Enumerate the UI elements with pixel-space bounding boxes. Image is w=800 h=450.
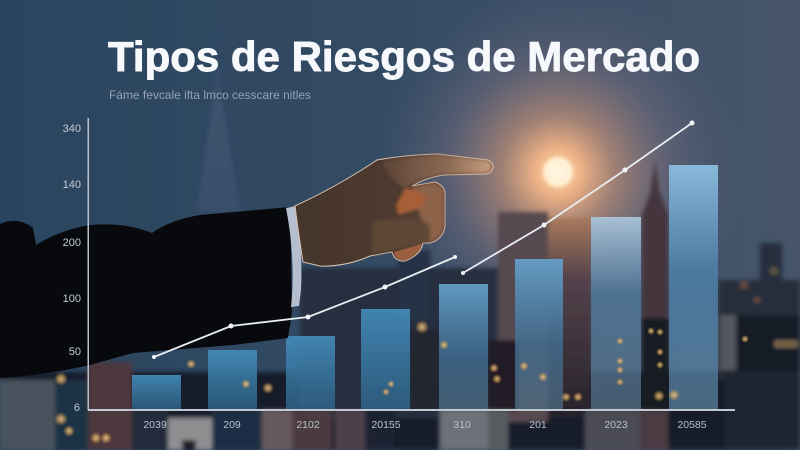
bar 209 (208, 350, 257, 409)
x axis labels: 2023 (604, 419, 628, 431)
y axis (88, 118, 89, 410)
chart: axes (88, 118, 735, 411)
x axis labels: 20585 (677, 419, 707, 431)
x axis (88, 409, 735, 411)
y axis labels: 50 (69, 346, 81, 358)
shirt cuff (286, 206, 301, 307)
bar 20585 (669, 165, 718, 409)
spire tower (197, 20, 240, 212)
x axis labels: 2102 (296, 419, 320, 431)
city lights (54, 266, 799, 444)
x axis labels (143, 419, 707, 431)
bar 2102 (286, 336, 335, 409)
figure: sleeve and pointing hand (0, 154, 493, 378)
title: Tipos de Riesgos de Mercado (108, 33, 700, 80)
y axis labels: 6 (74, 402, 80, 414)
x axis labels: 2039 (143, 419, 167, 431)
sun (540, 154, 576, 190)
y axis labels: 100 (63, 293, 81, 305)
lower curled finger (394, 244, 422, 260)
middle finger (412, 183, 444, 242)
subtitle: Fáme fevcale ifta lmco cesscare nitles (109, 88, 311, 102)
suit sleeve (0, 207, 292, 378)
chart: bars (132, 165, 718, 409)
y axis labels (63, 123, 81, 414)
thumb (372, 218, 430, 254)
bar 2023 (591, 217, 641, 409)
y axis labels: 200 (63, 237, 81, 249)
y axis labels: 340 (63, 123, 81, 135)
x axis labels: 310 (453, 419, 471, 431)
bar 201 (515, 259, 563, 409)
sun glow (360, 0, 760, 370)
x axis labels: 20155 (371, 419, 401, 431)
index finger (382, 155, 491, 188)
x axis labels: 209 (223, 419, 241, 431)
copper fingernail (396, 188, 427, 215)
y axis labels: 140 (63, 179, 81, 191)
bar 310 (439, 284, 488, 409)
x axis labels: 201 (529, 419, 547, 431)
bar 20155 (361, 309, 410, 409)
hand (295, 154, 493, 266)
bar 2039 (132, 375, 181, 409)
chart: trend line (152, 120, 694, 359)
